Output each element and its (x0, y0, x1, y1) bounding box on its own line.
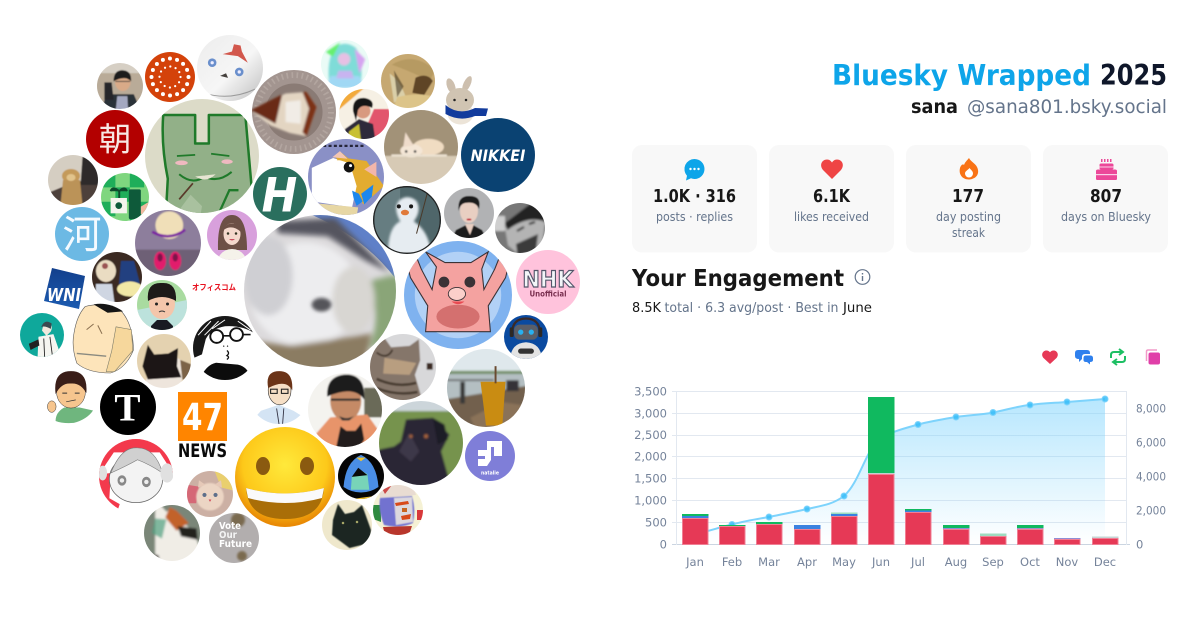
avatar: meerkats on rock (381, 54, 435, 108)
avatar: tricolour cat (137, 334, 191, 388)
avatar: rainbow haired girl (321, 40, 369, 88)
avatar: anime woman on lilac (207, 210, 257, 260)
title: Bluesky Wrapped (832, 59, 1091, 92)
engagement summary: June (842, 300, 872, 316)
left axis labels: 1,000 (634, 494, 667, 508)
avatar: natalie logo: natalie (481, 470, 499, 476)
month labels: Oct (1020, 555, 1040, 569)
panel: likes received: 6.1K (813, 186, 851, 207)
left axis labels: 2,000 (634, 450, 667, 464)
logo: 47 News (178, 392, 227, 462)
avatar: teal man sketch (20, 313, 64, 357)
heading: your engagement: Your Engagement (631, 266, 844, 292)
user name and handle: sana (911, 96, 958, 118)
avatar: natalie logo (465, 431, 515, 481)
panel: days on Bluesky: days on Bluesky (1061, 210, 1151, 224)
left axis labels (634, 384, 667, 552)
combo chart: monthly engagement (634, 384, 1166, 569)
avatar: green H logo: H (262, 168, 297, 223)
icon: chat bubble (684, 159, 704, 180)
avatar: black and white man (495, 203, 545, 253)
avatar: pink monster on blue (404, 241, 512, 349)
avatar: tabby cat (370, 334, 436, 400)
month labels: Nov (1056, 555, 1078, 569)
panel: day posting streak: streak (952, 226, 985, 240)
user name and handle: @sana801.bsky.social (967, 96, 1167, 118)
avatar: Vote Our Future: Our (219, 530, 237, 541)
right axis labels: 2,000 (1136, 504, 1166, 518)
month labels: Aug (945, 555, 967, 569)
avatar: drawn man with glasses (258, 371, 300, 424)
avatar: calico cat (138, 499, 206, 567)
panel: likes received: likes received (794, 210, 869, 224)
cumulative points (729, 396, 1108, 528)
panel: days on Bluesky: 807 (1090, 186, 1122, 207)
avatar: hamster photo (244, 215, 396, 367)
logo: 47 News: NEWS (178, 440, 227, 462)
month labels (685, 555, 1116, 569)
left axis labels: 0 (660, 538, 667, 552)
logo: WNI (44, 268, 85, 309)
panel: day posting streak (906, 145, 1031, 252)
avatar: NHK unofficial logo (516, 250, 580, 314)
chart grid (672, 391, 1130, 545)
right axis labels: 6,000 (1136, 436, 1166, 450)
avatar: orange dotted ring logo (145, 52, 195, 102)
avatar cluster (20, 35, 580, 567)
cumulative area (695, 399, 1105, 544)
avatar: man holding black cat (308, 373, 382, 447)
right axis labels: 0 (1136, 538, 1143, 552)
chart legend (1042, 349, 1160, 365)
avatar: robot with headphones (504, 315, 548, 359)
avatar: Vote Our Future: Future (219, 539, 252, 550)
right axis labels: 8,000 (1136, 402, 1166, 416)
icon: quotes legend (1146, 350, 1160, 364)
avatar: NYT logo: T (114, 386, 141, 429)
avatar: Asahi red logo (86, 110, 144, 168)
avatar: bald man cartoon (73, 304, 134, 373)
month labels: Jun (871, 555, 890, 569)
cumulative line (695, 399, 1105, 534)
icon: heart (821, 160, 843, 179)
left axis labels: 500 (645, 516, 667, 530)
avatar: penguin icon (338, 453, 384, 499)
right axis labels (1136, 402, 1166, 552)
avatar: grinning emoji (235, 427, 335, 527)
avatar: woman with short hair (444, 188, 494, 238)
icon: birthday cake (1096, 159, 1117, 180)
left axis labels: 2,500 (634, 428, 667, 442)
avatar: white ghost with red hat (197, 35, 263, 101)
avatar: drink by the lake (447, 349, 525, 427)
month labels: Jan (685, 555, 704, 569)
avatar: persian kitten (187, 471, 233, 517)
avatar: felted figure with shoes (135, 210, 201, 276)
month labels: Mar (758, 555, 780, 569)
avatar: man with glasses (97, 63, 143, 109)
avatar: NIKKEI logo (461, 118, 535, 192)
icon: replies legend (1075, 350, 1093, 364)
avatar: green plant in pot (101, 173, 149, 221)
logo: 47 News: 47 (182, 396, 223, 439)
month labels: Feb (722, 555, 742, 569)
panel: day posting streak: 177 (952, 186, 984, 207)
panel: days on Bluesky (1043, 145, 1168, 252)
logo: officecom: オフィスコム (192, 283, 236, 292)
avatar: snowman (373, 186, 441, 254)
panel: day posting streak: day posting (936, 210, 1001, 224)
logo: WNI: WNI (47, 285, 81, 306)
avatar: Vote Our Future (209, 513, 259, 563)
avatar: camel plush (48, 155, 98, 205)
avatar: woman on colourful backdrop (339, 89, 389, 139)
icon: reposts legend (1111, 349, 1125, 365)
right axis labels: 4,000 (1136, 470, 1166, 484)
avatar: Kawade logo: 河 (63, 214, 101, 257)
avatar: black dog on grass (379, 401, 463, 485)
avatar: Mii character (137, 280, 187, 330)
title: 2025 (1100, 59, 1167, 92)
month labels: Jul (910, 555, 925, 569)
engagement summary: 8.5K (632, 300, 662, 316)
avatar: NIKKEI logo: NIKKEI (471, 147, 526, 165)
avatar: glasses comic face (193, 316, 257, 380)
month labels: May (832, 555, 856, 569)
avatar: NHK unofficial logo: Unofficial (529, 290, 567, 299)
avatar: cartoon hamster with butterfly (308, 139, 384, 217)
avatar: NHK unofficial logo: NHK (522, 268, 575, 293)
icon: info (855, 270, 870, 284)
avatar: Kawade logo (55, 207, 109, 261)
left axis labels: 3,000 (634, 406, 667, 420)
avatar: cream cat resting (384, 110, 458, 184)
engagement summary: total · 6.3 avg/post · Best in (664, 300, 838, 316)
avatar: wrestling mask (373, 485, 423, 535)
month labels: Apr (797, 555, 817, 569)
month labels: Dec (1094, 555, 1116, 569)
panel: likes received (769, 145, 894, 252)
left axis labels: 3,500 (634, 384, 667, 398)
avatar: Asahi red logo: 朝 (99, 122, 131, 158)
avatar: anime girl on red (98, 439, 174, 513)
avatar: NYT logo (100, 379, 156, 435)
stacked bars (682, 397, 1118, 544)
avatar: black cat (322, 500, 372, 550)
avatar: green bunny drawing (145, 99, 259, 220)
panel: posts and replies: posts · replies (656, 210, 733, 224)
month labels: Sep (982, 555, 1004, 569)
left axis labels: 1,500 (634, 472, 667, 486)
panel: posts and replies (632, 145, 757, 252)
icon: flame (960, 158, 978, 180)
panel: posts and replies: 1.0K · 316 (653, 186, 736, 207)
avatar: green shirt cartoon man (47, 371, 93, 423)
avatar: blue plush toys (92, 252, 142, 302)
icon: likes legend (1042, 350, 1058, 364)
avatar: Vote Our Future: Vote (219, 521, 241, 532)
avatar: cake on plate (250, 70, 336, 154)
avatar: plush rabbit with scarf (445, 75, 488, 124)
